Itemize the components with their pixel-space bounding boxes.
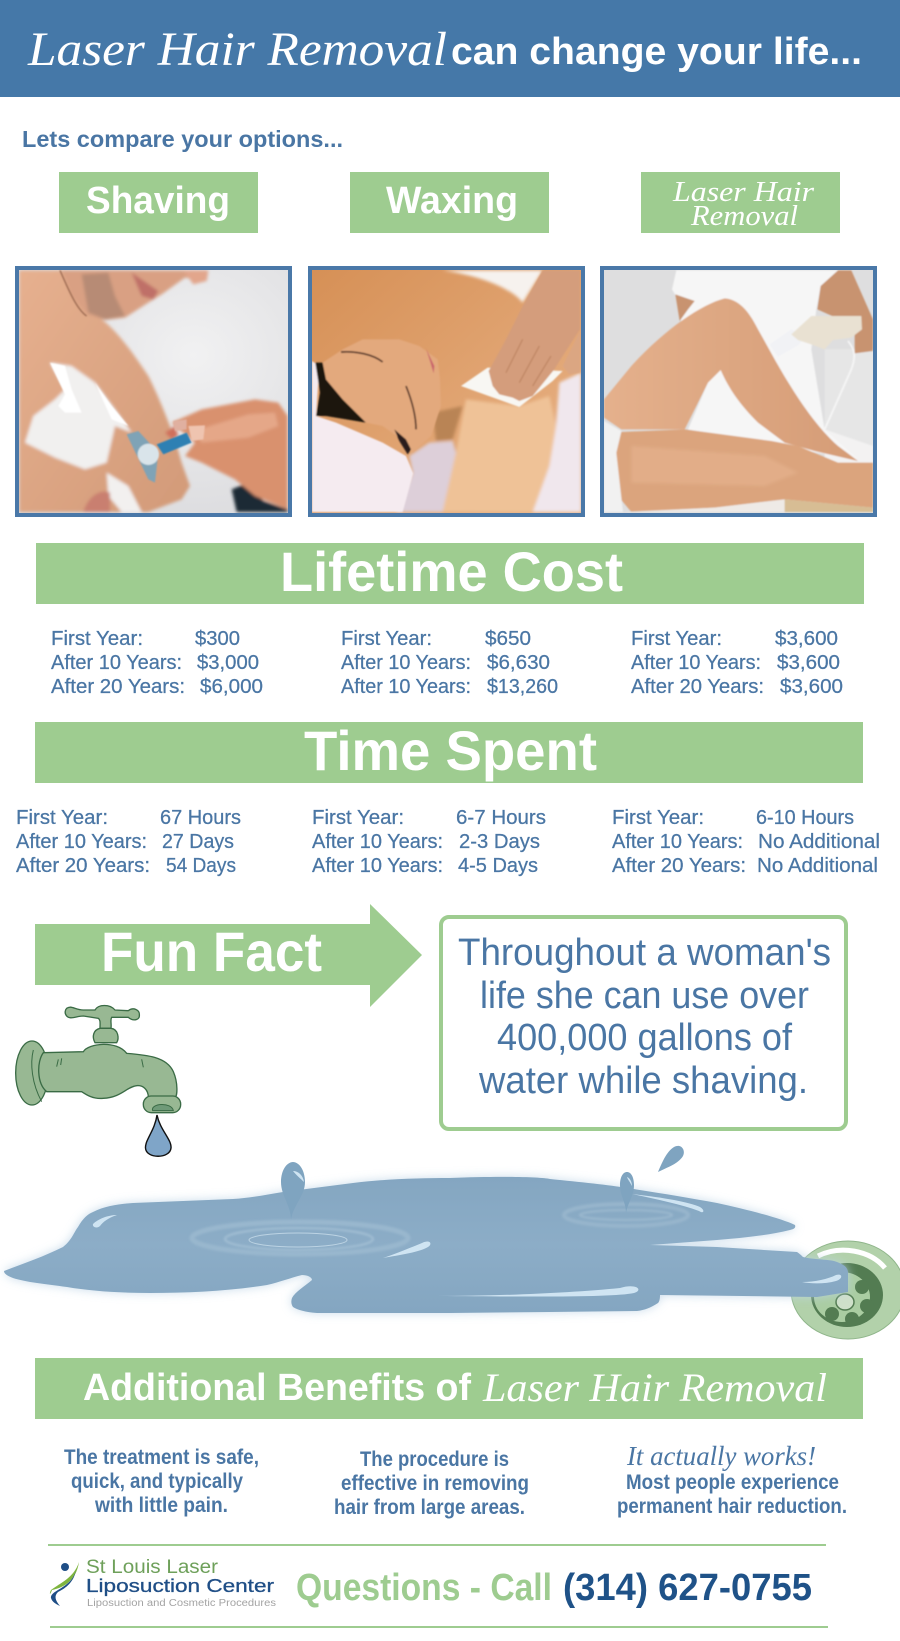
arrow: fun fact: Fun Fact: [101, 920, 322, 983]
callout: water fact: life she can use over: [480, 975, 809, 1017]
cost column: laser: After 10 Years:: [631, 652, 761, 674]
time column: waxing: 6-7 Hours: [456, 807, 546, 829]
time column: shaving: After 10 Years:: [16, 831, 147, 853]
cost column: laser: [631, 628, 843, 698]
option label: shaving: [59, 172, 258, 233]
call to action: Questions - Call: [296, 1567, 552, 1609]
time column: laser: After 10 Years:: [612, 831, 743, 853]
photo: man shaving chest: [17, 268, 290, 515]
callout: water fact: water while shaving.: [478, 1060, 808, 1102]
icon: logo figure: [50, 1562, 79, 1606]
cost column: shaving: $300: [195, 628, 240, 650]
cost column: laser: First Year:: [631, 628, 722, 650]
icon: falling droplet left: [281, 1162, 305, 1220]
cost column: waxing: $6,630: [487, 652, 550, 674]
cost column: waxing: After 10 Years:: [341, 676, 471, 698]
arrow: fun fact: [35, 904, 422, 1007]
callout: water fact: Throughout a woman's: [458, 932, 831, 974]
time column: waxing: After 10 Years:: [312, 855, 443, 877]
time column: waxing: After 10 Years:: [312, 831, 443, 853]
time column: shaving: After 20 Years:: [16, 855, 150, 877]
option label: waxing: Waxing: [386, 180, 518, 222]
benefit: large areas: The procedure is: [360, 1448, 509, 1471]
time column: waxing: First Year:: [312, 807, 404, 829]
benefit: safe and quick: with little pain.: [94, 1494, 228, 1517]
time column: shaving: [16, 807, 241, 877]
time column: waxing: 2-3 Days: [459, 831, 540, 853]
icon: falling droplet right: [620, 1172, 634, 1213]
icon: water drop: [145, 1115, 171, 1156]
callout: water fact: 400,000 gallons of: [497, 1017, 792, 1059]
time column: laser: [612, 807, 880, 877]
time column: laser: 6-10 Hours: [756, 807, 854, 829]
heading: lifetime cost: Lifetime Cost: [280, 540, 623, 603]
header banner: [0, 0, 900, 97]
illustration: water puddle: [4, 1177, 848, 1313]
photo: laser leg treatment: [602, 268, 875, 515]
heading: additional benefits: [35, 1358, 863, 1419]
photo: woman waxing: [310, 268, 583, 515]
cost column: waxing: $13,260: [487, 676, 558, 698]
callout: water fact: [441, 917, 846, 1129]
option label: shaving: Shaving: [86, 180, 230, 222]
benefit: it actually works: Most people experience: [626, 1471, 839, 1494]
cost column: shaving: $3,000: [197, 652, 259, 674]
heading: time spent: Time Spent: [304, 719, 597, 782]
icon: dripping faucet: [16, 1005, 181, 1113]
time column: laser: First Year:: [612, 807, 704, 829]
heading: additional benefits: Additional Benefits of: [83, 1367, 471, 1409]
option label: laser hair removal: Laser Hair: [672, 177, 814, 208]
cost column: shaving: After 10 Years:: [51, 652, 182, 674]
option label: laser hair removal: [641, 172, 840, 233]
option label: waxing: [350, 172, 549, 233]
logo: St Louis Laser Liposuction Center: Liposuction Center: [86, 1576, 274, 1596]
call to action: [296, 1567, 812, 1609]
benefit: large areas: hair from large areas.: [334, 1496, 525, 1519]
logo: St Louis Laser Liposuction Center: Liposuction and Cosmetic Procedures: [87, 1598, 276, 1609]
benefit: it actually works: [617, 1441, 847, 1518]
cost column: laser: $3,600: [780, 676, 843, 698]
cost column: laser: $3,600: [775, 628, 838, 650]
header banner: can change your life...: [451, 31, 862, 73]
benefit: large areas: [334, 1448, 529, 1519]
time column: shaving: 54 Days: [166, 855, 236, 877]
cost column: laser: After 20 Years:: [631, 676, 764, 698]
heading: time spent: [35, 719, 863, 783]
cost column: laser: $3,600: [777, 652, 840, 674]
illustration: drain: [791, 1241, 900, 1339]
header banner: Laser Hair Removal: [27, 23, 447, 76]
cost column: waxing: After 10 Years:: [341, 652, 471, 674]
intro text: Lets compare your options...: [22, 126, 343, 152]
cost column: shaving: After 20 Years:: [51, 676, 185, 698]
heading: lifetime cost: [36, 540, 864, 604]
time column: laser: No Additional: [757, 855, 878, 877]
cost column: shaving: First Year:: [51, 628, 143, 650]
option label: laser hair removal: Removal: [690, 201, 798, 232]
icon: splash droplet: [658, 1146, 684, 1172]
benefit: it actually works: It actually works!: [626, 1441, 816, 1471]
cost column: waxing: First Year:: [341, 628, 432, 650]
cost column: waxing: $650: [485, 628, 531, 650]
benefit: safe and quick: The treatment is safe,: [64, 1446, 259, 1469]
time column: shaving: 67 Hours: [160, 807, 241, 829]
benefit: safe and quick: [64, 1446, 259, 1517]
call to action: (314) 627-0755: [563, 1567, 812, 1609]
benefit: it actually works: permanent hair reduction.: [617, 1495, 847, 1518]
benefit: safe and quick: quick, and typically: [71, 1470, 243, 1493]
logo: St Louis Laser Liposuction Center: St Louis Laser: [86, 1557, 219, 1578]
time column: laser: After 20 Years:: [612, 855, 746, 877]
time column: waxing: [312, 807, 546, 877]
logo: St Louis Laser Liposuction Center: [50, 1557, 276, 1609]
time column: waxing: 4-5 Days: [458, 855, 538, 877]
time column: laser: No Additional: [758, 831, 880, 853]
cost column: waxing: [341, 628, 558, 698]
time column: shaving: 27 Days: [162, 831, 234, 853]
time column: shaving: First Year:: [16, 807, 108, 829]
heading: additional benefits: Laser Hair Removal: [482, 1365, 827, 1410]
cost column: shaving: [51, 628, 263, 698]
cost column: shaving: $6,000: [200, 676, 263, 698]
benefit: large areas: effective in removing: [341, 1472, 529, 1495]
